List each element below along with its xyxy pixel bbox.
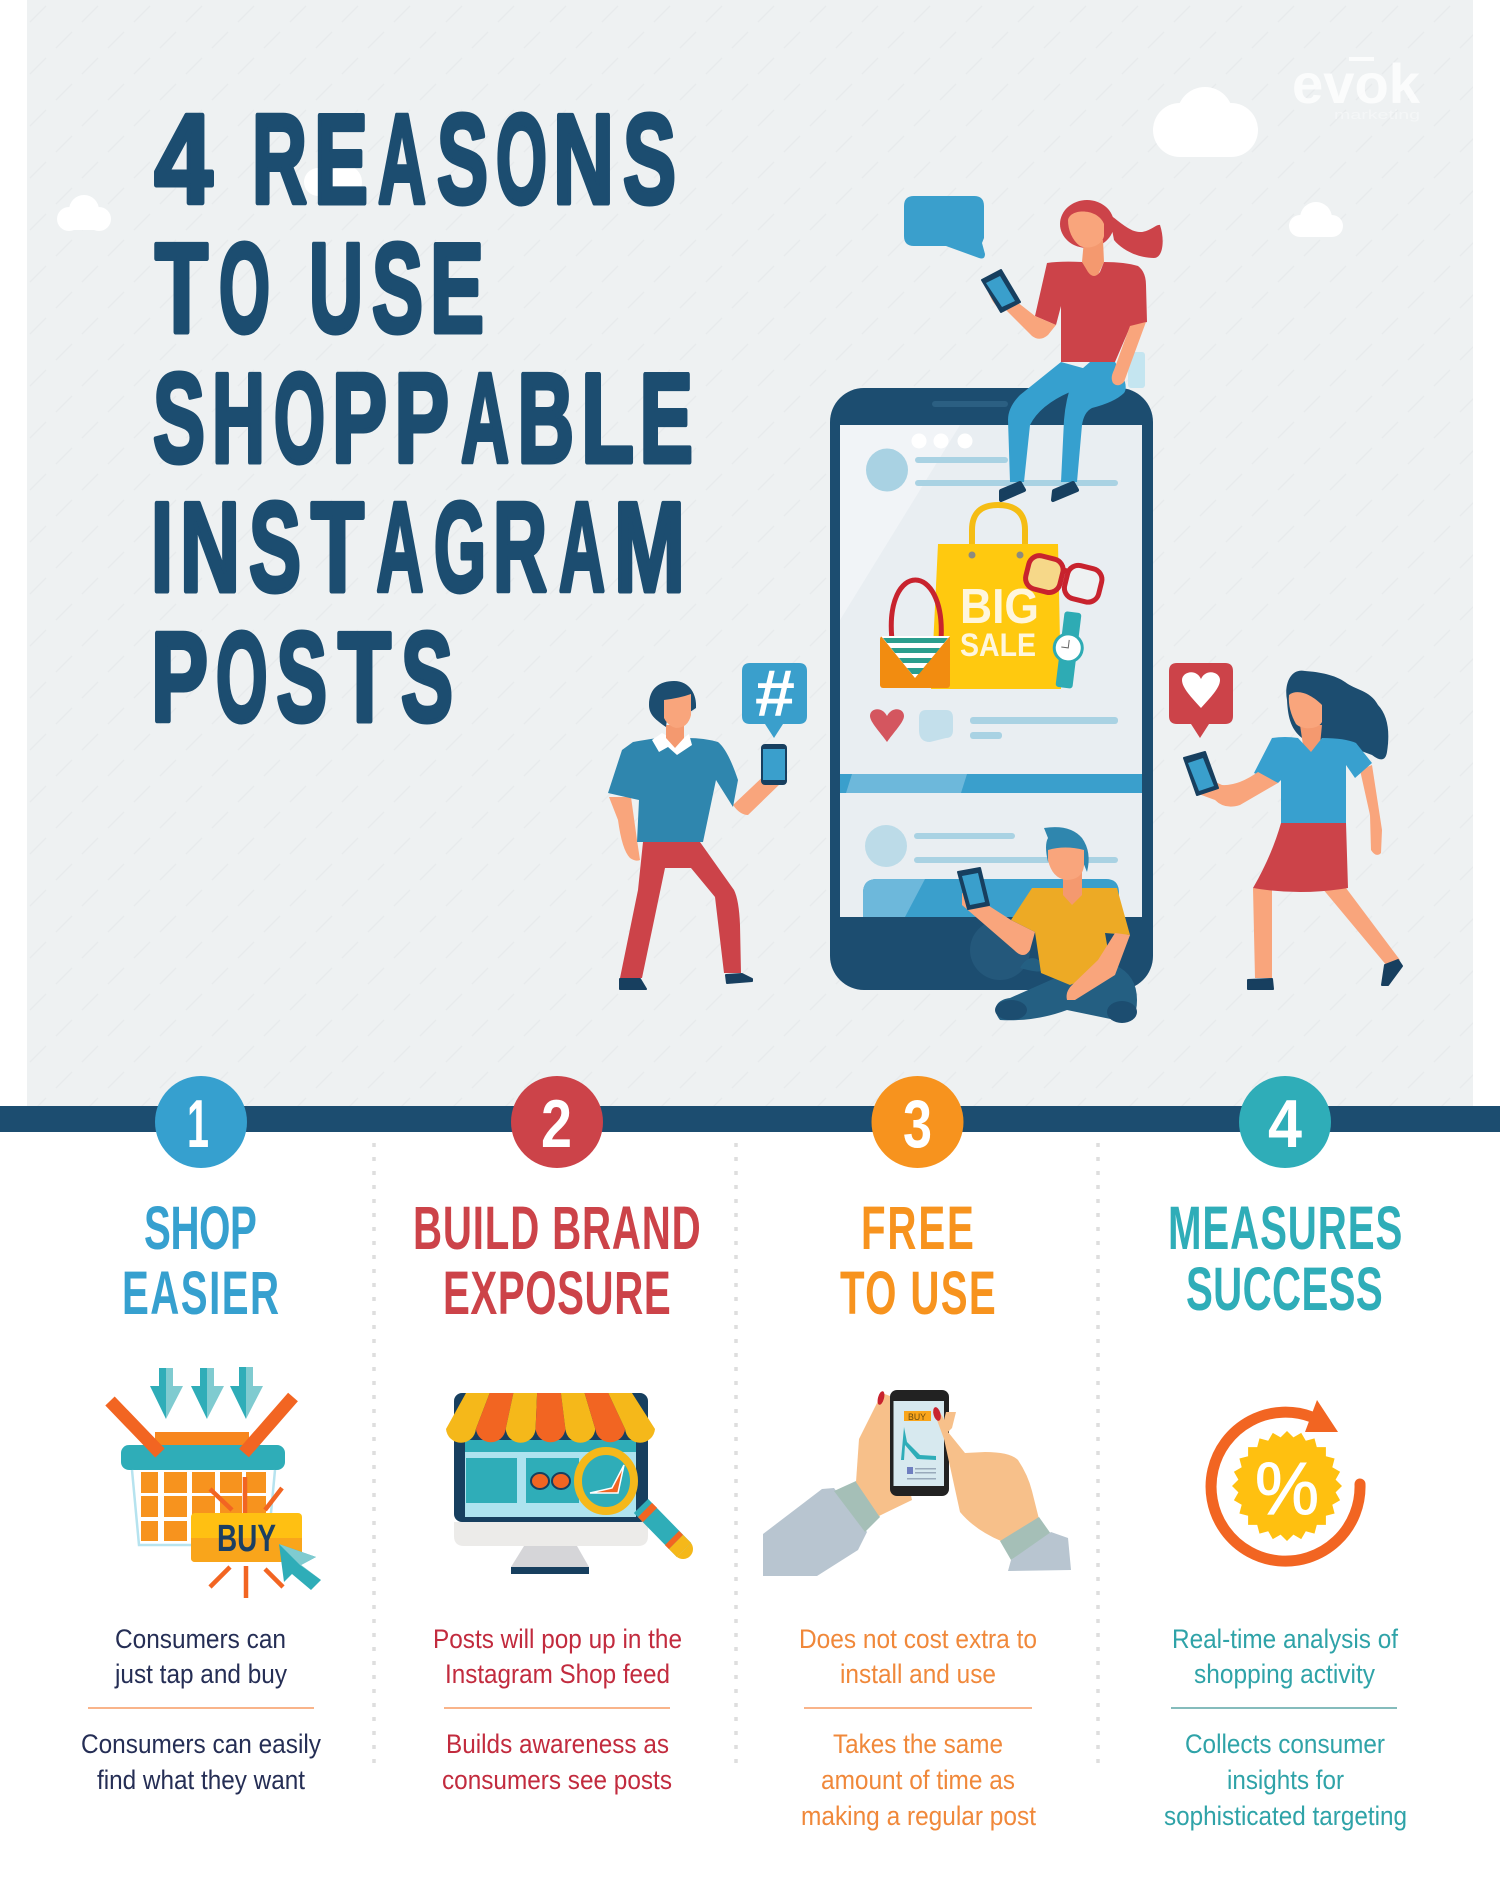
phone held bbox=[958, 868, 989, 909]
title: S bbox=[276, 606, 327, 748]
body copy: making a regular post bbox=[801, 1801, 1037, 1831]
number badge 1: 1 bbox=[187, 1086, 209, 1162]
body copy: Collects consumer bbox=[1185, 1729, 1385, 1759]
illustration: large phone bbox=[830, 388, 1153, 990]
first post header bbox=[866, 448, 1118, 492]
icon: percent badge with arrow ring: % bbox=[1255, 1447, 1319, 1530]
heading: SHOP bbox=[144, 1194, 257, 1262]
body copy: shopping activity bbox=[1194, 1659, 1376, 1689]
magnifier bbox=[578, 1451, 693, 1559]
heading: BUILD BRAND bbox=[413, 1194, 701, 1262]
heading bbox=[122, 1194, 279, 1327]
body copy bbox=[81, 1624, 322, 1795]
cloud: left bbox=[57, 195, 111, 231]
body copy: Consumers can easily bbox=[81, 1729, 322, 1759]
illustration: man with hashtag bbox=[608, 681, 787, 989]
title: O bbox=[216, 606, 268, 748]
icon: hashtag bubble: # bbox=[755, 656, 795, 730]
title: S bbox=[437, 88, 488, 230]
cloud: large right bbox=[1153, 87, 1258, 157]
icon: hands holding phone: BUY bbox=[908, 1412, 926, 1422]
title: A bbox=[559, 476, 605, 618]
body copy: Instagram Shop feed bbox=[445, 1659, 670, 1689]
phone held bbox=[982, 270, 1020, 312]
body copy: consumers see posts bbox=[442, 1765, 672, 1795]
title: A bbox=[376, 476, 424, 618]
awning bbox=[446, 1393, 655, 1443]
title: E bbox=[430, 217, 484, 359]
body copy: install and use bbox=[840, 1659, 996, 1689]
body copy: Takes the same bbox=[833, 1729, 1003, 1759]
title: E bbox=[640, 347, 693, 489]
divider bar bbox=[0, 1106, 1500, 1132]
title: R bbox=[493, 476, 547, 618]
column 1: shop easier bbox=[81, 1076, 322, 1795]
illustration: woman with heart bbox=[1184, 671, 1402, 989]
illustration: big sale bag: SALE bbox=[960, 627, 1036, 663]
hero background panel bbox=[27, 0, 1473, 1107]
icon: speech bubble bbox=[904, 196, 985, 258]
icon: watch bbox=[1049, 610, 1087, 689]
arrows bbox=[150, 1367, 263, 1419]
icon: storefront monitor with magnifier bbox=[446, 1393, 693, 1574]
title: T bbox=[155, 217, 208, 359]
phone held bbox=[761, 744, 787, 785]
icon: percent badge with arrow ring bbox=[1211, 1400, 1360, 1561]
title: U bbox=[309, 217, 363, 359]
column 2: build brand exposure bbox=[413, 1076, 701, 1795]
number badge 1 bbox=[155, 1076, 247, 1168]
heading: MEASURES bbox=[1168, 1194, 1402, 1262]
cloud: small right bbox=[1289, 202, 1343, 237]
cloud: behind title bbox=[304, 165, 362, 199]
glasses bbox=[531, 1473, 570, 1489]
illustration: seated man bbox=[958, 827, 1137, 1023]
number badge 2 bbox=[511, 1076, 603, 1168]
body copy: Real-time analysis of bbox=[1172, 1624, 1399, 1654]
title: R bbox=[252, 88, 307, 230]
divider band bbox=[840, 774, 1142, 793]
logo: evok: evok bbox=[1292, 52, 1421, 115]
heading: EASIER bbox=[122, 1259, 279, 1327]
heading: EXPOSURE bbox=[443, 1259, 671, 1327]
title: A bbox=[461, 347, 509, 489]
screen dots bbox=[912, 434, 972, 448]
title: S bbox=[372, 217, 423, 359]
illustration: big sale bag: BIG bbox=[960, 580, 1039, 634]
icon: heart bubble bbox=[1169, 663, 1233, 738]
reactions row bbox=[870, 709, 1118, 742]
title: 4 bbox=[154, 88, 212, 230]
heading bbox=[1168, 1194, 1402, 1323]
body copy bbox=[1164, 1624, 1407, 1831]
title: E bbox=[314, 88, 368, 230]
title: N bbox=[180, 476, 240, 618]
title: T bbox=[338, 606, 391, 748]
title: S bbox=[249, 476, 301, 618]
title: G bbox=[434, 476, 486, 618]
title: L bbox=[581, 347, 634, 489]
column 3: free to use bbox=[763, 1076, 1071, 1831]
title: N bbox=[553, 88, 614, 230]
second post bbox=[863, 825, 1119, 917]
title: O bbox=[219, 217, 270, 359]
number badge 2: 2 bbox=[541, 1086, 572, 1162]
icon: basket with buy button bbox=[110, 1367, 321, 1598]
icon: hands holding phone bbox=[763, 1390, 1071, 1576]
body copy: Posts will pop up in the bbox=[433, 1624, 682, 1654]
title bbox=[151, 88, 693, 748]
body copy: Does not cost extra to bbox=[799, 1624, 1037, 1654]
body copy: sophisticated targeting bbox=[1164, 1801, 1407, 1831]
body copy: insights for bbox=[1227, 1765, 1344, 1795]
title: I bbox=[151, 476, 173, 618]
body copy: amount of time as bbox=[821, 1765, 1015, 1795]
body copy: Consumers can bbox=[115, 1624, 286, 1654]
column 4: measures success bbox=[1164, 1076, 1407, 1831]
title: P bbox=[394, 347, 449, 489]
illustration: big sale bag bbox=[931, 505, 1061, 689]
body copy: just tap and buy bbox=[114, 1659, 288, 1689]
title: P bbox=[151, 606, 208, 748]
heading: FREE bbox=[861, 1194, 974, 1262]
title: O bbox=[274, 347, 325, 489]
heading bbox=[840, 1194, 996, 1327]
icon: basket with buy button: BUY bbox=[217, 1518, 276, 1560]
icon: red glasses bbox=[1023, 553, 1104, 604]
body copy bbox=[799, 1624, 1037, 1831]
dotted column dividers bbox=[374, 1143, 1098, 1767]
title: B bbox=[518, 347, 574, 489]
phone held bbox=[1184, 752, 1218, 795]
title: A bbox=[378, 88, 426, 230]
illustration: woman sitting on phone bbox=[982, 200, 1163, 500]
body copy bbox=[433, 1624, 682, 1795]
logo: evok: marketing bbox=[1334, 107, 1420, 122]
title: S bbox=[153, 347, 205, 489]
number badge 4 bbox=[1239, 1076, 1331, 1168]
title: H bbox=[212, 347, 265, 489]
title: T bbox=[311, 476, 364, 618]
title: S bbox=[623, 88, 676, 230]
heading: TO USE bbox=[840, 1259, 996, 1327]
heading: SUCCESS bbox=[1186, 1255, 1383, 1323]
title: M bbox=[614, 476, 685, 618]
number badge 4: 4 bbox=[1268, 1086, 1302, 1162]
heading bbox=[413, 1194, 701, 1327]
title: S bbox=[401, 606, 453, 748]
body copy: find what they want bbox=[97, 1765, 306, 1795]
icon: hashtag bubble bbox=[742, 656, 807, 738]
title: P bbox=[332, 347, 387, 489]
body copy: Builds awareness as bbox=[446, 1729, 669, 1759]
number badge 3 bbox=[872, 1076, 964, 1168]
icon: handbag bbox=[880, 580, 950, 688]
number badge 3: 3 bbox=[903, 1086, 932, 1162]
title: O bbox=[496, 88, 547, 230]
